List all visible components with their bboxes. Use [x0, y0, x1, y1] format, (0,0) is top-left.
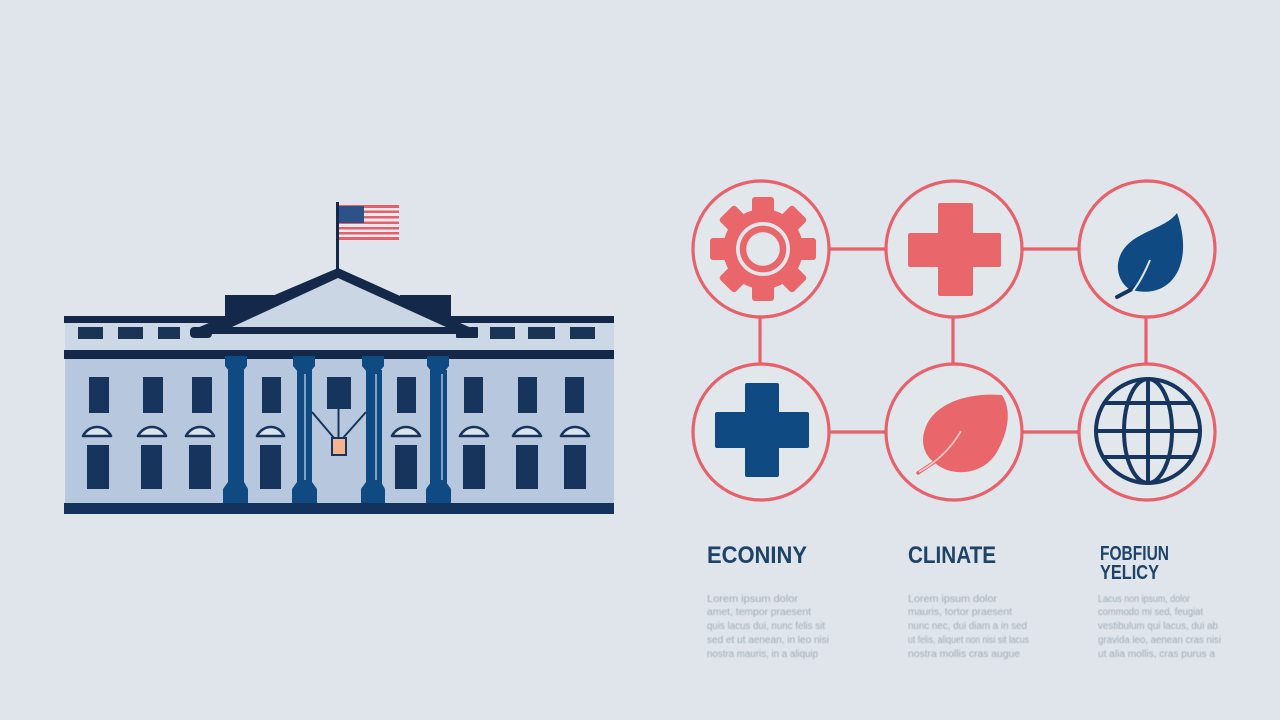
left roof block — [225, 295, 277, 323]
icon: red cross — [886, 181, 1022, 317]
column: climate — [908, 542, 1029, 660]
heading: foreign policy: FOBFIUN — [1100, 543, 1169, 565]
American flag — [339, 205, 399, 240]
attic windows — [78, 327, 595, 339]
body text: climate: ut felis, aliquet non nisi sit lacus — [908, 635, 1029, 646]
top cornice — [64, 316, 614, 323]
column: economy — [707, 542, 829, 660]
body text: climate: nunc nec, dui diam a in sed — [908, 621, 1027, 632]
right roof block — [400, 295, 451, 323]
heading second line: YELICY — [1100, 562, 1160, 584]
icon network — [693, 181, 1215, 500]
pediment — [190, 268, 478, 338]
columns — [223, 356, 451, 504]
body text: climate: nostra mollis cras augue — [908, 649, 1020, 660]
body text: economy: Lorem ipsum dolor — [707, 594, 799, 605]
icon: red leaf — [886, 364, 1022, 500]
column: foreign policy — [1098, 543, 1221, 660]
portico lantern — [312, 408, 366, 455]
mid cornice — [64, 350, 614, 359]
heading: economy: ECONINY — [707, 542, 807, 569]
body text: foreign policy: ut alia mollis, cras purus a — [1098, 649, 1215, 660]
attic band — [65, 322, 614, 351]
flag pole — [336, 202, 339, 270]
White House building illustration — [64, 202, 614, 514]
body text: economy — [707, 594, 829, 660]
icon: blue leaf — [1079, 181, 1215, 317]
lower windows — [87, 445, 586, 489]
body text: foreign policy: commodo mi sed, feugiat — [1098, 607, 1203, 618]
arched window pediments — [83, 427, 589, 436]
body text: climate: mauris, tortor praesent — [908, 607, 1012, 618]
upper windows — [89, 377, 584, 413]
body text: climate: Lorem ipsum dolor — [908, 594, 998, 605]
body text: foreign policy: gravida leo, aenean cras nisi — [1098, 635, 1221, 646]
body text: foreign policy: vestibulum qui lacus, dui ab — [1098, 621, 1218, 632]
icon: blue cross — [693, 364, 829, 500]
body text: economy: sed et ut aenean, in leo nisi — [707, 635, 829, 646]
body text: foreign policy: Lacus non ipsum, dolor — [1098, 594, 1191, 605]
body text: economy: amet, tempor praesent — [707, 607, 811, 618]
heading: climate: CLINATE — [908, 542, 996, 569]
body text: economy: quis lacus dui, nunc felis sit — [707, 621, 825, 632]
column highlights — [305, 374, 442, 480]
base band — [64, 503, 614, 514]
body text: foreign policy — [1098, 594, 1221, 660]
icon: globe — [1079, 364, 1215, 500]
body text: climate — [908, 594, 1029, 660]
building facade — [65, 359, 614, 505]
body text: economy: nostra mauris, in a aliquip — [707, 649, 818, 660]
connector lines — [760, 249, 1146, 432]
icon: gear — [693, 181, 829, 317]
